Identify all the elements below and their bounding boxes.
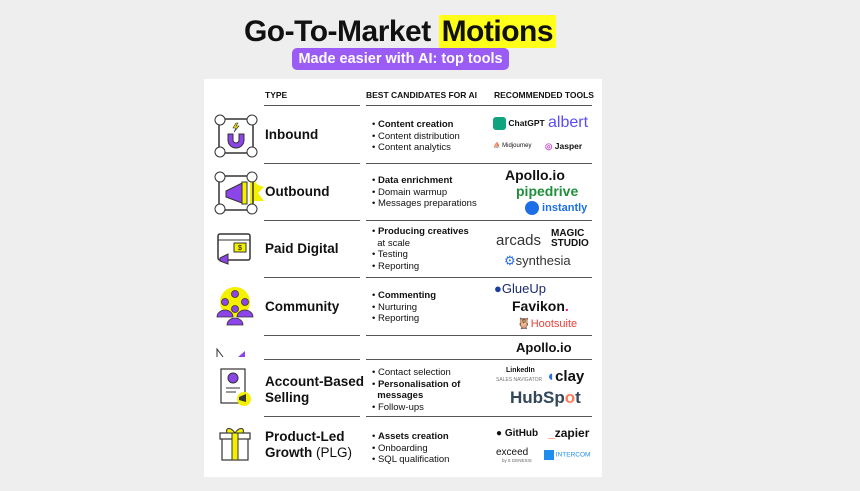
tools: paid digital: ⚙synthesia	[504, 253, 571, 268]
tools: account-based selling: SALES NAVIGATOR	[496, 377, 542, 383]
bullets: account-based selling	[372, 367, 460, 412]
tools: inbound: albert	[548, 114, 588, 131]
tools: product-led growth	[496, 426, 590, 463]
bullets: inbound: • Content distribution	[372, 130, 460, 142]
tools: paid digital: MAGIC	[551, 228, 584, 239]
type: community: Community	[265, 299, 339, 314]
tools: paid digital: STUDIO	[551, 238, 589, 249]
header: recommended tools: RECOMMENDED TOOLS	[494, 90, 594, 100]
icon: partial cut-off icon	[216, 348, 245, 357]
panel: table card	[204, 79, 602, 477]
bullets: inbound: • Content analytics	[372, 142, 451, 153]
bullets: inbound: • Content creation	[372, 119, 453, 130]
tools: inbound: ◎ Jasper	[545, 141, 582, 151]
type: account-based selling: Account-Based	[265, 374, 364, 389]
tools: community	[494, 281, 577, 330]
icon: product-led growth gift	[219, 428, 251, 461]
type: product-led growth: Growth (PLG)	[265, 445, 352, 460]
tools: paid digital	[496, 228, 589, 268]
tools: account-based selling: LinkedIn	[506, 367, 535, 374]
header: type: TYPE	[265, 90, 287, 100]
tools: apollo extra row: Apollo.io	[516, 340, 572, 355]
type: product-led growth	[265, 429, 352, 460]
bullets: account-based selling: • Contact selection	[372, 367, 451, 378]
bullets: community: • Nurturing	[372, 302, 417, 312]
bullets: product-led growth	[372, 431, 449, 465]
bullets: paid digital: at scale	[377, 238, 410, 248]
icon: outbound megaphone	[214, 172, 264, 214]
bullets: account-based selling: • Follow-ups	[372, 402, 424, 412]
bullets: paid digital: • Producing creatives	[372, 226, 469, 237]
tools: product-led growth: _zapier	[548, 426, 589, 440]
tools: outbound: instantly	[542, 202, 587, 214]
tools: product-led growth: INTERCOM	[556, 452, 590, 459]
bullets: paid digital: • Reporting	[372, 260, 419, 272]
icon: account-based selling	[220, 368, 251, 406]
bullets: account-based selling: messages	[377, 390, 423, 401]
subtitle pill	[292, 48, 509, 70]
type: outbound: Outbound	[265, 184, 329, 199]
tools: inbound	[493, 114, 588, 151]
type: account-based selling	[265, 374, 364, 405]
type: inbound: Inbound	[265, 127, 318, 142]
icon: paid digital	[217, 233, 251, 265]
bullets: community: • Reporting	[372, 313, 419, 324]
bullets: community	[372, 290, 436, 324]
icon: inbound magnet	[214, 114, 258, 158]
tools: account-based selling: HubSpot	[510, 388, 581, 407]
bullets: outbound: • Domain warmup	[372, 186, 447, 198]
bullets: product-led growth: • Onboarding	[372, 442, 428, 454]
icon: paid digital: $	[238, 245, 242, 252]
tools: account-based selling	[496, 366, 584, 407]
bullets: community: • Commenting	[372, 290, 436, 301]
type: product-led growth: Product-Led	[265, 429, 344, 444]
type: account-based selling: Selling	[265, 390, 309, 405]
bullets: outbound: • Data enrichment	[372, 175, 452, 186]
icon: community	[216, 287, 254, 326]
tools: product-led growth: exceed	[496, 447, 528, 458]
title: Go-To-Market Motions	[244, 15, 553, 48]
bullets: paid digital: • Testing	[372, 249, 408, 260]
tools: outbound: pipedrive	[516, 183, 578, 199]
bullets: inbound	[372, 119, 460, 153]
bullets: outbound	[372, 175, 477, 209]
tools: outbound	[505, 167, 588, 215]
type: paid digital: Paid Digital	[265, 241, 339, 256]
bullets: product-led growth: • Assets creation	[372, 431, 449, 442]
tools: paid digital: arcads	[496, 232, 541, 249]
subtitle pill: Made easier with AI: top tools	[298, 51, 503, 67]
tools: community: 🦉Hootsuite	[517, 318, 577, 330]
bullets: paid digital	[372, 226, 469, 272]
tools: inbound: ChatGPT	[508, 118, 545, 128]
tools: outbound: Apollo.io	[505, 167, 565, 183]
tools: product-led growth: by 5 GENESIS	[502, 458, 532, 463]
tools: inbound: ⛵ Midjourney	[493, 143, 531, 149]
bullets: account-based selling: • Personalisation of	[372, 378, 460, 390]
tools: community: ●GlueUp	[494, 281, 546, 296]
tools: account-based selling: ◖clay	[546, 368, 584, 385]
bullets: product-led growth: • SQL qualification	[372, 454, 449, 465]
bullets: outbound: • Messages preparations	[372, 198, 477, 209]
header: best candidates: BEST CANDIDATES FOR AI	[366, 90, 477, 100]
tools: product-led growth: ● GitHub	[496, 428, 538, 439]
tools: community: Favikon.	[512, 298, 569, 314]
